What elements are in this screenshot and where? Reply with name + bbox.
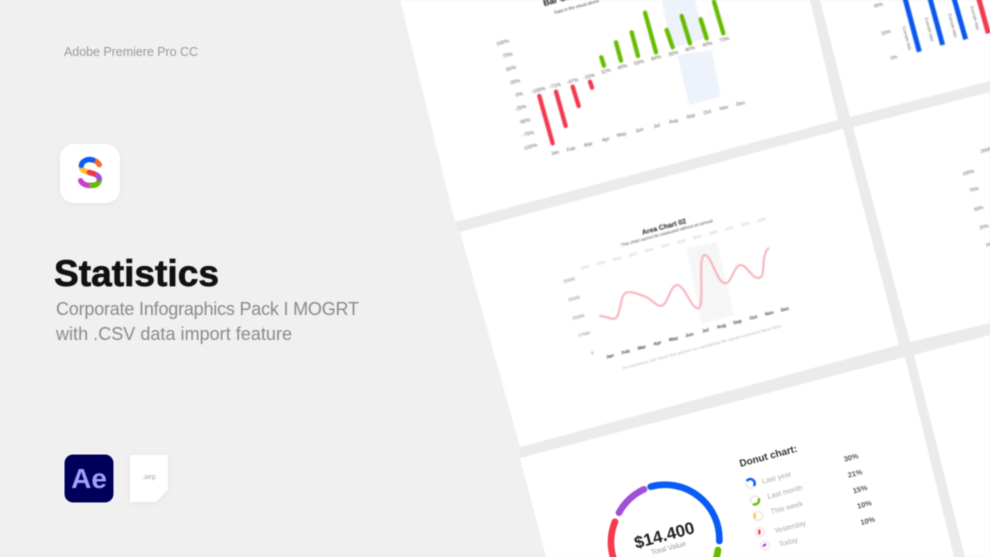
month labels: Aug — [668, 118, 679, 126]
legend mini donut icons — [746, 479, 769, 550]
column captions: Example data — [924, 17, 935, 42]
pink trend line — [600, 248, 768, 319]
month labels: Sep — [686, 113, 696, 121]
top faint labels: 2000 — [596, 259, 607, 266]
panel: area chart slide — [460, 129, 899, 447]
legend labels — [761, 469, 807, 549]
bar value labels: 11% — [600, 67, 612, 76]
month labels: Jan — [551, 149, 560, 157]
bar value labels: 53% — [634, 59, 645, 67]
legend labels: Yesterday — [773, 518, 807, 535]
bar value labels: 84% — [651, 54, 662, 62]
top faint labels: 2000 — [676, 237, 687, 245]
panel: bar chart slide — [400, 0, 838, 222]
month labels: Jan — [606, 353, 615, 360]
legend labels: Last month — [766, 483, 804, 501]
top faint labels: 2000 — [740, 220, 751, 227]
product label: Adobe Premiere Pro CC — [64, 45, 198, 59]
description text: with .CSV data import feature — [55, 324, 292, 344]
legend labels: Today — [778, 535, 799, 549]
y axis labels: 25% — [510, 78, 521, 86]
month labels: Feb — [566, 146, 576, 154]
legend percentages: 10% — [859, 514, 876, 527]
negative red bars — [539, 82, 592, 143]
axis ticks: 40% — [873, 2, 884, 9]
bar value labels: 40% — [702, 40, 714, 49]
column captions: Example data — [902, 26, 913, 51]
y axis labels: 75% — [502, 51, 514, 60]
positive green bars — [601, 2, 723, 66]
bar value labels — [531, 36, 731, 95]
bar value labels: 73% — [719, 36, 731, 44]
top faint labels: 2000 — [612, 255, 623, 262]
icon: After Effects badge — [64, 454, 114, 503]
panel: bottom right slide — [914, 335, 990, 557]
column captions: Example data — [970, 6, 981, 31]
footnote: Do transitions and charts that perform for maintaining the overall customers these lines — [622, 324, 781, 370]
chart title: Area Chart 02 — [641, 218, 687, 237]
legend percentages: 15% — [852, 483, 869, 495]
column captions — [902, 6, 981, 51]
axis ticks: 20% — [881, 29, 891, 36]
month labels: Feb — [621, 348, 631, 355]
month labels — [606, 306, 790, 360]
panel: donut chart slide — [520, 357, 954, 557]
description text: Corporate Infographics Pack I MOGRT — [56, 299, 359, 319]
legend percentages: 21% — [847, 467, 864, 480]
legend labels: This week — [770, 499, 804, 516]
axis ticks: 100% — [962, 169, 975, 176]
legend percentages — [843, 451, 876, 527]
chart subtitle: This chart cannot be measured without an annual — [620, 218, 713, 248]
y axis labels: 50% — [506, 65, 517, 73]
top faint labels: 2000 — [580, 263, 591, 271]
icon: After Effects badge: Ae — [71, 463, 107, 494]
axis ticks — [873, 2, 898, 61]
month labels: Dec — [780, 306, 790, 313]
month labels: Jun — [685, 331, 694, 338]
y axis labels: -25% — [514, 104, 528, 113]
top faint labels: 2000 — [757, 216, 767, 223]
month labels: Aug — [716, 323, 727, 330]
y axis labels: 0% — [515, 91, 524, 99]
panel: column chart slide, top right — [820, 0, 990, 117]
axis ticks: 75% — [969, 186, 979, 193]
month labels: Jul — [653, 123, 661, 130]
legend percentages: 10% — [856, 498, 873, 511]
month labels: Dec — [736, 100, 746, 108]
axis ticks: 0% — [890, 54, 898, 61]
donut chart — [611, 485, 719, 557]
month labels: May — [617, 131, 628, 139]
y axis labels: -75% — [522, 130, 535, 139]
month labels: Nov — [719, 104, 730, 112]
donut total caption: Total Value — [650, 539, 687, 557]
month labels: Mar — [637, 344, 647, 351]
y axis labels: 17500 — [578, 330, 591, 338]
y axis labels: 100% — [496, 38, 510, 48]
donut total value: $14.400 — [632, 518, 696, 553]
month labels: Oct — [703, 109, 713, 117]
y axis labels: 25000 — [568, 294, 581, 302]
month labels: Oct — [749, 314, 758, 321]
main title: Statistics — [54, 253, 219, 294]
y axis labels: -50% — [518, 117, 532, 126]
highlighted grey column — [687, 242, 734, 323]
panel: right middle slide — [853, 92, 990, 342]
top faint labels: 2000 — [724, 224, 735, 232]
y axis labels — [563, 276, 595, 356]
bar value labels: 35% — [668, 50, 680, 58]
legend heading: Donut chart: — [738, 444, 799, 470]
y axis labels — [496, 38, 538, 152]
month labels: May — [668, 335, 679, 342]
description text — [55, 299, 359, 344]
column captions: Example data — [947, 13, 959, 38]
legend labels: Last year — [761, 469, 793, 486]
month labels — [551, 100, 746, 157]
month labels: Apr — [601, 136, 611, 144]
top faint labels: 2000 — [708, 229, 719, 236]
bar value labels: 40% — [617, 63, 629, 71]
month labels: Nov — [764, 310, 775, 317]
bar value labels: 40% — [685, 45, 696, 53]
month labels: Apr — [653, 340, 662, 347]
y axis labels: 10000 — [563, 276, 576, 284]
y axis labels: -100% — [522, 142, 538, 152]
top faint labels: 2000 — [628, 250, 639, 258]
top faint labels — [580, 216, 767, 271]
blue and red columns — [905, 0, 988, 52]
gutter backdrop behind tilted slides — [400, 0, 990, 557]
bar value labels: -100% — [531, 86, 547, 95]
icon: app logo — [60, 144, 120, 203]
axis ticks: 25% — [979, 223, 989, 230]
axis ticks: 50% — [974, 205, 984, 212]
month labels: Mar — [584, 141, 594, 149]
bar value labels: -15% — [583, 72, 596, 81]
month labels: Jul — [701, 327, 709, 334]
icon: file document: .aep — [142, 474, 156, 481]
month labels: Jun — [635, 127, 644, 135]
y axis labels: 25000 — [572, 313, 585, 321]
highlight column — [662, 0, 721, 105]
axis ticks — [962, 146, 990, 248]
bar value labels: -71% — [549, 82, 562, 91]
top faint labels: 2000 — [692, 233, 703, 240]
top faint labels: 2000 — [660, 242, 671, 249]
bar value labels: -47% — [566, 77, 579, 86]
top faint labels: 2000 — [644, 246, 655, 253]
month labels: Sep — [733, 318, 742, 325]
y axis labels: 0 — [591, 350, 595, 356]
legend percentages: 30% — [843, 451, 860, 464]
icon: file document — [130, 455, 168, 502]
